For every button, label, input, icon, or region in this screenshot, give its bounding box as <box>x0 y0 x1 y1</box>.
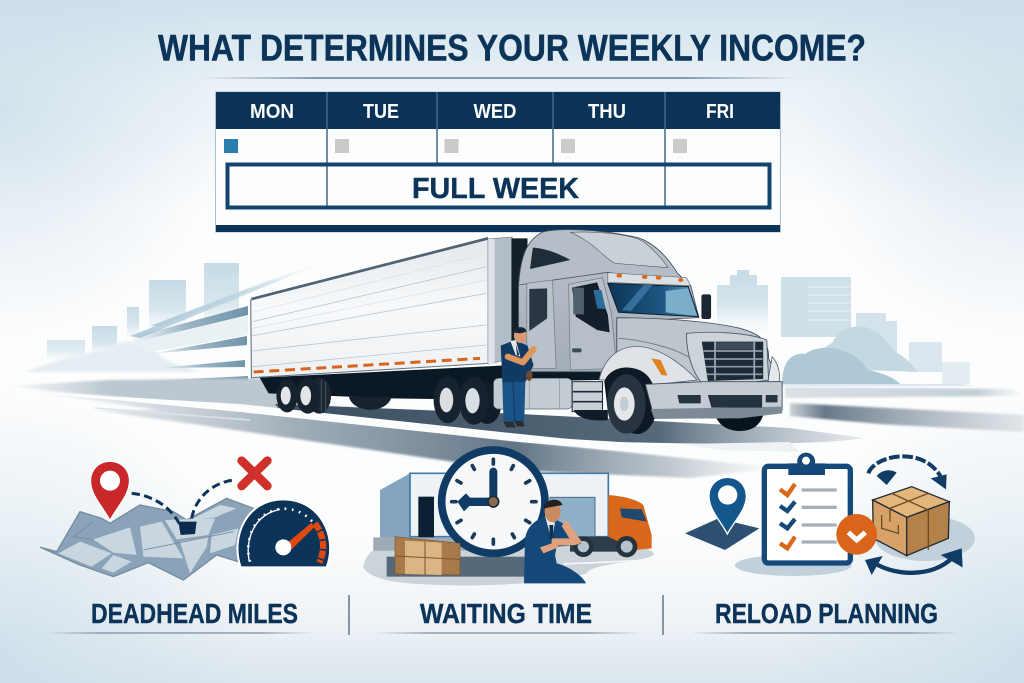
label: reload planning: RELOAD PLANNING <box>715 598 938 629</box>
fuel tank and steps <box>494 378 608 421</box>
icon: wall clock <box>442 450 545 553</box>
icon: red pin <box>91 461 129 520</box>
calendar header: MON <box>250 101 294 123</box>
day checkboxes <box>224 139 687 153</box>
hood and grille <box>599 318 779 412</box>
semi truck with driver <box>251 230 782 434</box>
waiting man <box>524 500 586 583</box>
front bumper <box>645 382 782 418</box>
driver <box>501 327 534 427</box>
calendar header: FRI <box>706 101 734 123</box>
label: waiting time: WAITING TIME <box>420 598 592 629</box>
full week bar <box>228 164 770 208</box>
icon: deadhead miles map and gauge <box>41 461 330 580</box>
weekly calendar <box>216 92 780 232</box>
icon: waiting time warehouse and clock <box>363 450 654 585</box>
icon: cardboard box <box>873 487 949 556</box>
icon: reload planning <box>685 453 975 576</box>
speed lines <box>130 263 320 384</box>
icon: blue pin on map <box>685 477 759 550</box>
dashed route <box>132 480 233 525</box>
label: deadhead miles: DEADHEAD MILES <box>91 598 298 629</box>
calendar header: THU <box>588 101 626 123</box>
cab body <box>519 230 711 372</box>
warehouse <box>373 473 608 577</box>
icon: orange check badge <box>836 514 877 555</box>
icon: speedometer <box>237 499 330 567</box>
icon: orange truck <box>570 495 652 557</box>
skyline left <box>25 263 239 372</box>
front wheels <box>607 374 763 434</box>
calendar header: WED <box>474 101 516 123</box>
trailer <box>251 237 527 378</box>
icon: cardboard boxes <box>395 537 460 575</box>
calendar header <box>216 92 780 129</box>
map <box>41 498 253 580</box>
full week bar: FULL WEEK <box>412 173 579 205</box>
title: WHAT DETERMINES YOUR WEEKLY INCOME? <box>158 28 866 68</box>
icon: clipboard checklist <box>764 453 850 563</box>
road <box>5 378 1024 478</box>
chassis <box>260 366 601 400</box>
calendar header: TUE <box>363 101 399 123</box>
icon: red x <box>242 461 267 486</box>
arrow junction <box>178 522 197 535</box>
icon: cycle arrows <box>865 456 963 575</box>
skyline right <box>717 270 975 386</box>
trailer wheels <box>276 377 501 425</box>
